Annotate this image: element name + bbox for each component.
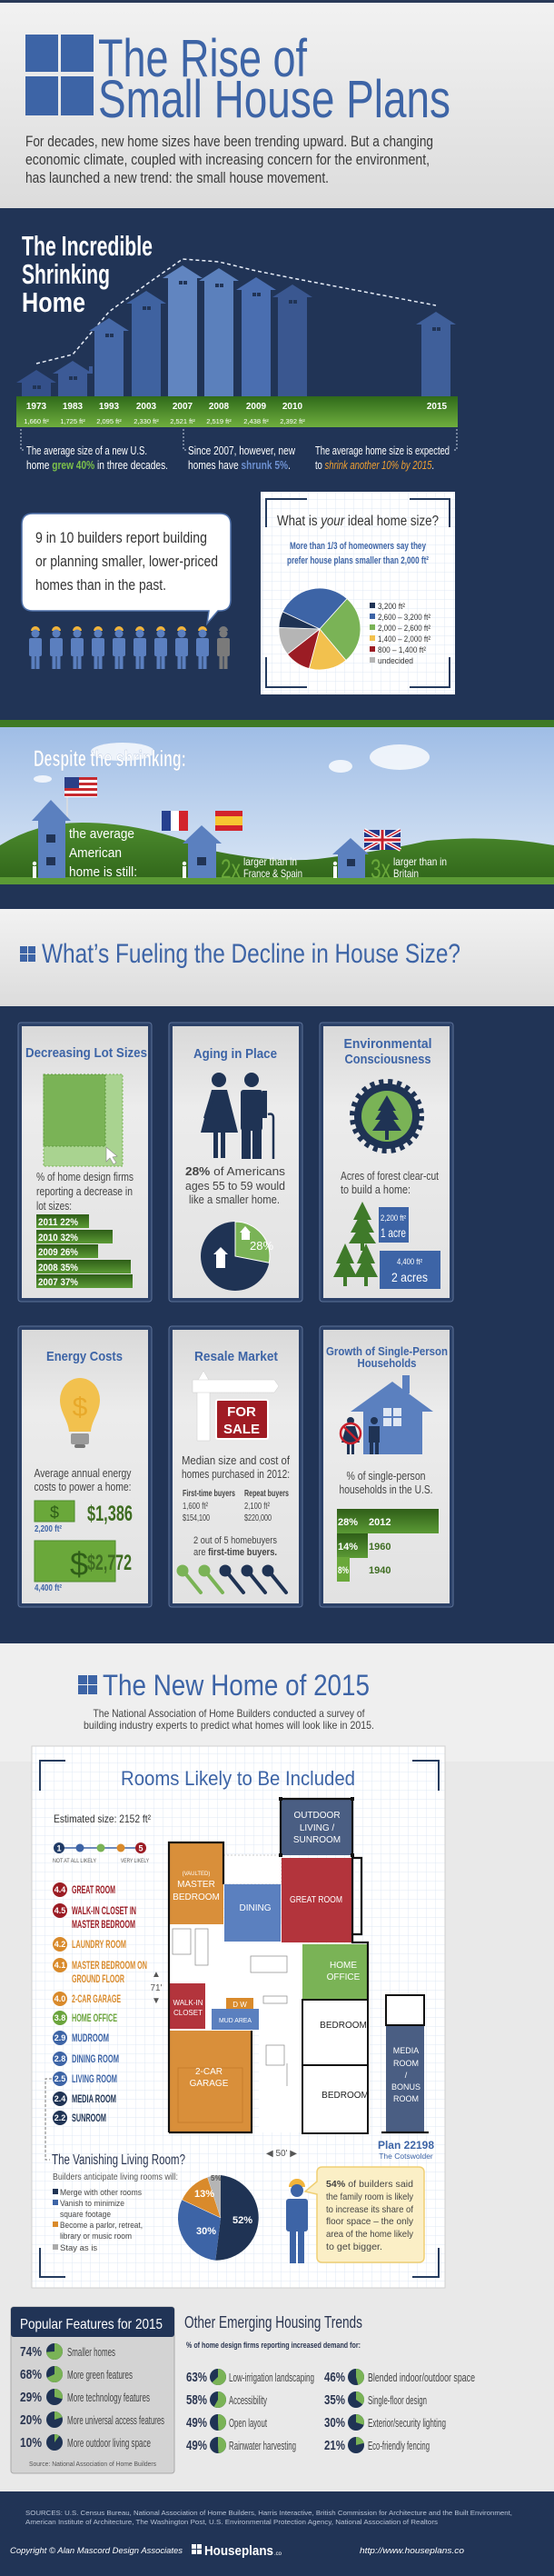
panel: Rooms likely to be included: Estimated size: 2152 ft² (54, 1812, 151, 1825)
ranked rooms list: 3.8 (54, 2013, 65, 2022)
panel: Decreasing Lot Sizes (18, 1023, 152, 1302)
footer: .co (274, 2551, 282, 2557)
panel: Decreasing Lot Sizes: 2007 37% (38, 1277, 78, 1288)
house size bar chart (16, 259, 458, 427)
floor plan: Plan 22198: MASTER (177, 1880, 215, 1890)
panel: Energy Costs: 2,200 ft² (35, 1524, 63, 1534)
panel: Other Emerging Housing Trends: Eco-friendly fencing (368, 2440, 430, 2452)
panel: Popular Features for 2015: More outdoor living space (67, 2437, 151, 2450)
stat: 3x larger than Britain: larger than in (393, 855, 447, 868)
house size bar chart: 2,519 ft² (206, 417, 232, 425)
panel: Environmental Consciousness: 2 acres (391, 1270, 428, 1284)
ranked rooms list: SUNROOM (72, 2113, 106, 2124)
stat: 2x larger than France & Spain: France & Spain (243, 867, 302, 880)
caption: shrunk 5%: homes have shrunk 5%. (188, 458, 291, 472)
floor plan: Plan 22198: D W (232, 2001, 247, 2009)
icon: France & Spain house with flags (162, 811, 242, 878)
panel: Popular Features for 2015: 29% (20, 2390, 42, 2405)
panel: Environmental Consciousness: to build a home: (341, 1183, 411, 1196)
ranked rooms list: GROUND FLOOR (72, 1974, 124, 1985)
house size bar chart: 2,095 ft² (96, 417, 122, 425)
house size bar chart: 1993 (99, 402, 120, 412)
ranked rooms list: 4.4 (54, 1885, 65, 1894)
ranked rooms list: 4.2 (54, 1940, 65, 1949)
caption: shrink another 10%: to shrink another 10% by 2015. (315, 458, 434, 472)
panel: Other Emerging Housing Trends: Other Emerging Housing Trends (184, 2313, 362, 2331)
title logo squares (25, 35, 94, 115)
text: the average American home is still: home is still: (69, 864, 137, 880)
panel: Other Emerging Housing Trends: 46% (324, 2370, 345, 2385)
panel: Decreasing Lot Sizes: lot sizes: (36, 1200, 72, 1213)
floor plan: Plan 22198: 2-CAR (195, 2067, 223, 2077)
house size bar chart: 1,660 ft² (24, 417, 49, 425)
floor plan: Plan 22198: Plan 22198 (378, 2139, 434, 2152)
house size bar chart: 2,438 ft² (243, 417, 269, 425)
panel: Environmental Consciousness (320, 1023, 453, 1302)
panel: Resale Market: are first-time buyers. (193, 1547, 277, 1558)
panel: Growth of Single-Person Households: Households (358, 1356, 416, 1370)
footer: SOURCES: U.S. Census Bureau, National Association of Home Builders, Harris Interactive, British Commission for Architecture and the Built Environment, (25, 2509, 512, 2517)
speech bubble: 9 in 10 builders (22, 514, 231, 624)
panel: Popular Features for 2015: 68% (20, 2367, 42, 2382)
panel: Other Emerging Housing Trends: 35% (324, 2392, 345, 2408)
panel: Popular Features for 2015: Source: National Association of Home Builders (29, 2461, 156, 2468)
floor plan: Plan 22198: ◀ 50' ▶ (266, 2149, 297, 2159)
floor plan: Plan 22198: BEDROOM (320, 2021, 367, 2031)
floor plan: Plan 22198: BEDROOM (322, 2091, 369, 2101)
floor plan: Plan 22198: GARAGE (190, 2079, 229, 2089)
intro text (25, 133, 433, 186)
panel: Other Emerging Housing Trends: % of home design firms reporting increased demand for: (186, 2341, 361, 2351)
floor plan: Plan 22198: CLOSET (173, 2009, 203, 2017)
vanishing living room legend: Stay as is (60, 2243, 97, 2253)
panel: Resale Market: 2,100 ft² (244, 1502, 271, 1512)
panel: Energy Costs: $2,772 (87, 1551, 132, 1575)
despite shrinking section (0, 720, 554, 909)
panel: ideal home size pie chart: prefer house plans smaller than 2,000 ft² (287, 555, 429, 566)
vanishing living room legend: The Vanishing Living Room? (52, 2152, 185, 2168)
panel: ideal home size pie chart: 1,400 – 2,000 ft² (378, 634, 430, 644)
subtitle: NAHB survey: building industry experts to predict what homes will look like in 2015. (84, 1719, 374, 1732)
panel: Environmental Consciousness: Consciousness (345, 1052, 430, 1067)
panel: Other Emerging Housing Trends (184, 2313, 475, 2453)
caption: shrunk 5%: Since 2007, however, new (188, 444, 295, 457)
panel: Other Emerging Housing Trends: Accessibility (229, 2394, 267, 2407)
panel: Other Emerging Housing Trends: Open layout (229, 2417, 267, 2430)
panel: Growth of Single-Person Households: 2012 (369, 1517, 391, 1528)
ranked rooms list: DINING ROOM (72, 2054, 119, 2065)
panel: Popular Features for 2015: 10% (20, 2435, 42, 2451)
floor plan: Plan 22198: OFFICE (327, 1972, 361, 1982)
floor plan: Plan 22198: WALK-IN (173, 1999, 203, 2007)
caption: shrink another 10%: The average home size is expected (315, 444, 450, 457)
panel: Resale Market (169, 1326, 302, 1607)
panel: Resale Market: SALE (223, 1422, 260, 1437)
likelihood scale legend (53, 1842, 149, 1864)
pie chart: vanishing living room: 5% (211, 2174, 222, 2182)
new home section background (0, 1643, 554, 2491)
stat: 2x larger than France & Spain: larger than in (243, 855, 297, 868)
panel: Popular Features for 2015 (11, 2307, 174, 2473)
panel: Other Emerging Housing Trends: Single-floor design (368, 2394, 427, 2407)
stat: 3x larger than Britain (371, 854, 447, 884)
heading: The Incredible Shrinking Home: The Incredible (22, 230, 153, 262)
panel: Environmental Consciousness: 2,200 ft² (381, 1213, 406, 1223)
house size bar chart: 2015 (427, 402, 448, 412)
section header: What's Fueling (0, 909, 554, 1006)
intro text: For decades, new home sizes have been trending upward. But a changing (25, 133, 433, 150)
panel: Resale Market: 1,600 ft² (183, 1502, 209, 1512)
vanishing living room legend: Become a parlor, retreat, (60, 2221, 143, 2231)
caption: grew 40%: The average size of a new U.S. (26, 444, 147, 457)
panel: Other Emerging Housing Trends: Blended indoor/outdoor space (368, 2371, 475, 2384)
panel: ideal home size pie chart: undecided (378, 656, 413, 666)
section header: What's Fueling: What’s Fueling the Decline in House Size? (42, 939, 460, 969)
floor plan: Plan 22198: BEDROOM (173, 1892, 220, 1902)
panel: Growth of Single-Person Households (320, 1326, 453, 1607)
heading: The Incredible Shrinking Home: Home (22, 286, 85, 318)
text: the average American home is still: the average (69, 826, 134, 842)
likelihood scale legend: 1 (56, 1843, 62, 1852)
panel: Growth of Single-Person Households: 8% (338, 1565, 349, 1576)
panel: ideal home size pie chart: 2,000 – 2,600 ft² (378, 624, 430, 634)
floor plan: Plan 22198: HOME (330, 1961, 357, 1971)
footer: Houseplans (204, 2543, 273, 2559)
panel: Resale Market: homes purchased in 2012: (182, 1468, 290, 1481)
ranked rooms list: 2.4 (54, 2094, 65, 2103)
caption: shrunk 5% (188, 444, 295, 472)
floor plan: Plan 22198: / (405, 2071, 408, 2080)
panel: Popular Features for 2015: 74% (20, 2344, 42, 2360)
house size bar chart: 2009 (246, 402, 267, 412)
panel: Decreasing Lot Sizes: 2008 35% (38, 1263, 78, 1273)
vanishing living room legend: library or music room (60, 2232, 132, 2242)
title: The Rise of (98, 29, 308, 88)
house size bar chart: 2007 (173, 402, 193, 412)
speech bubble: 9 in 10 builders: 9 in 10 builders report building (35, 529, 207, 546)
icon: builder with callout: to increase its share of (326, 2204, 413, 2215)
vanishing living room legend: Vanish to minimize (60, 2199, 124, 2209)
ranked rooms list: WALK-IN CLOSET IN (72, 1906, 136, 1917)
floor plan: Plan 22198: ▼ (152, 1996, 161, 2006)
shrinking home section background (0, 208, 554, 720)
panel: Energy Costs: $ (70, 1545, 88, 1583)
ranked rooms list: LIVING ROOM (72, 2074, 117, 2085)
floor plan: Plan 22198: BONUS (391, 2082, 420, 2092)
panel: Other Emerging Housing Trends: 58% (186, 2392, 207, 2408)
panel: Decreasing Lot Sizes: % of home design firms (36, 1171, 134, 1183)
panel: Aging in Place: 28% of Americans (185, 1165, 285, 1178)
caption: grew 40%: home grew 40% in three decades. (26, 458, 168, 472)
footer: Copyright © Alan Mascord Design Associates (10, 2546, 183, 2555)
speech bubble: 9 in 10 builders: or planning smaller, lower-priced (35, 553, 218, 570)
panel: Aging in Place: ages 55 to 59 would (185, 1180, 285, 1193)
panel: Popular Features for 2015: Popular Features for 2015 (20, 2317, 163, 2332)
intro text: has launched a new trend: the small house movement. (25, 169, 329, 186)
panel: Popular Features for 2015: More universal access features (67, 2414, 164, 2427)
panel: Energy Costs: costs to power a home: (35, 1481, 131, 1493)
stat: 3x larger than Britain: 3x (371, 854, 391, 884)
ranked rooms list: GREAT ROOM (72, 1885, 115, 1896)
panel: Rooms likely to be included: Rooms Likely to Be Included (121, 1767, 355, 1790)
panel: Growth of Single-Person Households: Growth of Single-Person (326, 1344, 448, 1358)
pie chart: vanishing living room: 52% (232, 2215, 252, 2226)
floor plan: Plan 22198: ROOM (393, 2094, 419, 2103)
ranked rooms list: 4.5 (54, 1906, 65, 1915)
panel: Growth of Single-Person Households: 1940 (369, 1565, 391, 1576)
panel: ideal home size pie chart: 2,600 – 3,200 ft² (378, 613, 430, 623)
title: Small House Plans (98, 70, 450, 129)
panel: Growth of Single-Person Households: 14% (338, 1542, 358, 1553)
icon: builder with callout: the family room is likely (326, 2192, 414, 2202)
panel: Energy Costs: $ (73, 1393, 88, 1423)
caption: shrink another 10% (315, 444, 450, 472)
icon: builder with callout: floor space – the only (326, 2216, 414, 2227)
ranked rooms list: 2.5 (54, 2074, 65, 2083)
floor plan: Plan 22198: OUTDOOR (293, 1811, 341, 1821)
panel: Decreasing Lot Sizes: reporting a decrease in (36, 1185, 133, 1198)
ranked rooms list: 2-CAR GARAGE (72, 1994, 121, 2005)
title (98, 29, 450, 129)
ranked rooms list: MEDIA ROOM (72, 2094, 116, 2105)
ranked rooms list: MASTER BEDROOM ON (72, 1961, 147, 1972)
footer (0, 2491, 554, 2576)
panel: Popular Features for 2015: Smaller homes (67, 2346, 115, 2359)
panel: Popular Features for 2015: More green features (67, 2369, 133, 2381)
panel: Resale Market: First-time buyers (183, 1489, 235, 1499)
ranked rooms list: 4.1 (54, 1961, 65, 1970)
panel: Energy Costs: Energy Costs (46, 1349, 123, 1364)
vanishing living room legend: Builders anticipate living rooms will: (53, 2172, 178, 2182)
caption connectors (21, 429, 457, 450)
heading: The Incredible Shrinking Home: Shrinking (22, 258, 110, 290)
house size bar chart: 1973 (26, 402, 47, 412)
panel: Other Emerging Housing Trends: Exterior/security lighting (368, 2417, 446, 2430)
floor plan: Plan 22198: ▲ (152, 1970, 161, 1980)
ranked rooms list (53, 1882, 147, 2125)
panel: Energy Costs: 4,400 ft² (35, 1583, 63, 1593)
ranked rooms list: 2.9 (54, 2033, 65, 2042)
house size bar chart: 1983 (63, 402, 84, 412)
panel: Resale Market: Resale Market (194, 1349, 278, 1364)
stat: 2x larger than France & Spain (221, 854, 302, 884)
panel: ideal home size pie chart: 800 – 1,400 ft² (378, 645, 426, 655)
panel: ideal home size pie chart: More than 1/3 of homeowners say they (290, 541, 427, 552)
floor plan: Plan 22198 (150, 1797, 434, 2161)
caption: grew 40% (26, 444, 168, 472)
panel: Other Emerging Housing Trends: 49% (186, 2415, 207, 2431)
floor plan: Plan 22198: (VAULTED) (183, 1872, 210, 1877)
pie chart: vanishing living room (178, 2174, 259, 2261)
floor plan: Plan 22198: ROOM (393, 2059, 419, 2068)
heading: The Incredible Shrinking Home (22, 230, 153, 318)
house size bar chart: 2010 (282, 402, 303, 412)
panel: Aging in Place (169, 1023, 302, 1302)
icon: British house with flag (332, 830, 401, 878)
panel: Aging in Place: like a smaller home. (189, 1193, 280, 1206)
stat: 3x larger than Britain: Britain (393, 867, 419, 880)
text: the average American home is still (69, 826, 137, 880)
panel: Environmental Consciousness: 4,400 ft² (397, 1257, 422, 1266)
floor plan: Plan 22198: DINING (240, 1903, 272, 1913)
panel: ideal home size pie chart (261, 492, 455, 694)
panel: Environmental Consciousness: Acres of forest clear-cut (341, 1170, 439, 1183)
vanishing living room legend (52, 2152, 185, 2253)
speech bubble: 9 in 10 builders: homes than in the past. (35, 576, 166, 594)
intro text: economic climate, coupled with increasing concern for the environment, (25, 151, 430, 168)
likelihood scale legend: VERY LIKELY (121, 1858, 149, 1864)
icon: builder with callout: area of the home likely (326, 2229, 414, 2240)
panel: Popular Features for 2015: 20% (20, 2412, 42, 2428)
panel: Aging in Place: Aging in Place (193, 1046, 277, 1062)
subtitle: NAHB survey (84, 1707, 374, 1732)
panel: Decreasing Lot Sizes: 2010 32% (38, 1233, 78, 1243)
floor plan: Plan 22198: LIVING / (300, 1823, 334, 1833)
fueling section background (0, 1006, 554, 1643)
floor plan: Plan 22198: 71' (150, 1983, 163, 1993)
icon: American house with flag (32, 777, 97, 878)
panel: Other Emerging Housing Trends: 49% (186, 2438, 207, 2453)
ranked rooms list: 2.8 (54, 2054, 65, 2063)
house size bar chart: 2003 (136, 402, 157, 412)
panel: Energy Costs: $1,386 (87, 1502, 133, 1526)
ranked rooms list: 4.0 (54, 1994, 65, 2003)
ranked rooms list: MUDROOM (72, 2033, 109, 2044)
icon: builder with callout (286, 2167, 424, 2263)
subtitle: NAHB survey: The National Association of Home Builders conducted a survey of (93, 1707, 365, 1720)
panel: Popular Features for 2015: More technology features (67, 2391, 150, 2404)
ranked rooms list: 2.2 (54, 2113, 65, 2122)
panel: Growth of Single-Person Households: 1960 (369, 1542, 391, 1553)
icon: builder with callout: 54% of builders said (326, 2179, 413, 2190)
likelihood scale legend: NOT AT ALL LIKELY (53, 1858, 97, 1864)
panel: Environmental Consciousness: Environmental (343, 1036, 432, 1052)
panel: Decreasing Lot Sizes: 2009 26% (38, 1247, 78, 1258)
panel: Rooms likely to be included (32, 1746, 445, 2288)
floor plan: Plan 22198: MUD AREA (219, 2018, 252, 2024)
house size bar chart: 1,725 ft² (60, 417, 85, 425)
text: the average American home is still: American (69, 845, 122, 861)
pie chart: vanishing living room: 13% (194, 2189, 214, 2200)
panel: Decreasing Lot Sizes: Decreasing Lot Sizes (25, 1045, 147, 1061)
heading: Despite the shrinking: Despite the shrinking: (34, 746, 186, 772)
icon: builder with callout: to get bigger. (326, 2242, 382, 2252)
panel: Energy Costs: Average annual energy (35, 1467, 132, 1480)
panel: Other Emerging Housing Trends: 63% (186, 2370, 207, 2385)
ranked rooms list: HOME OFFICE (72, 2013, 117, 2024)
panel: ideal home size pie chart: What is your ideal home size? (277, 514, 439, 529)
heading: The New Home of 2015: The New Home of 2015 (103, 1669, 370, 1702)
panel: Other Emerging Housing Trends: Low-irrigation landscaping (229, 2371, 314, 2384)
panel: Aging in Place: 28% (250, 1239, 273, 1253)
panel: Resale Market: Median size and cost of (182, 1454, 290, 1467)
panel: Resale Market: 2 out of 5 homebuyers (193, 1535, 277, 1546)
panel: Environmental Consciousness: 1 acre (381, 1225, 406, 1240)
floor plan: Plan 22198: SUNROOM (293, 1835, 341, 1845)
panel: Decreasing Lot Sizes: 2011 22% (38, 1217, 78, 1228)
panel: Resale Market: $154,100 (183, 1513, 210, 1523)
vanishing living room legend: square footage (60, 2210, 111, 2220)
house size bar chart: 2008 (209, 402, 230, 412)
floor plan: Plan 22198: The Cotswolder (379, 2152, 433, 2161)
panel: ideal home size pie chart: 3,200 ft² (378, 602, 405, 612)
panel: Energy Costs: $ (50, 1503, 59, 1522)
house size bar chart: 2,521 ft² (170, 417, 195, 425)
panel: Energy Costs (18, 1326, 152, 1607)
panel: Growth of Single-Person Households: 28% (338, 1517, 358, 1528)
footer: American Institute of Architecture, The Washington Post, U.S. Environmental Protection Agency, National Association of Realtors (25, 2518, 438, 2526)
panel: Resale Market: $220,000 (244, 1513, 272, 1523)
ranked rooms list: LAUNDRY ROOM (72, 1940, 126, 1951)
panel: Other Emerging Housing Trends: 30% (324, 2415, 345, 2431)
ranked rooms list: MASTER BEDROOM (72, 1920, 135, 1931)
floor plan: Plan 22198: GREAT ROOM (290, 1895, 342, 1905)
panel: Growth of Single-Person Households: households in the U.S. (340, 1483, 432, 1496)
floor plan: Plan 22198: MEDIA (393, 2046, 419, 2055)
header background (0, 0, 554, 208)
house size bar chart: 2,392 ft² (280, 417, 305, 425)
vanishing living room legend: Merge with other rooms (60, 2188, 142, 2198)
footer: http://www.houseplans.co (360, 2546, 464, 2555)
house size bar chart: 2,330 ft² (134, 417, 159, 425)
panel: Other Emerging Housing Trends: 21% (324, 2438, 345, 2453)
likelihood scale legend: 5 (138, 1843, 143, 1852)
pie chart: vanishing living room: 30% (196, 2226, 216, 2237)
panel: Resale Market: Repeat buyers (244, 1489, 289, 1499)
panel: Resale Market: FOR (227, 1404, 256, 1420)
icon row: builders (29, 626, 230, 669)
stat: 2x larger than France & Spain: 2x (221, 854, 241, 884)
panel: Other Emerging Housing Trends: Rainwater harvesting (229, 2440, 296, 2452)
panel: Growth of Single-Person Households: % of single-person (347, 1470, 426, 1483)
